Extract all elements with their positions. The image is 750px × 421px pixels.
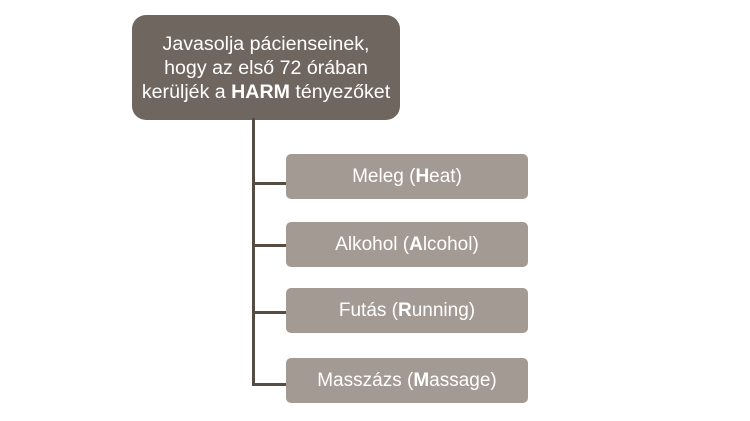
title box xyxy=(132,15,400,120)
title box: Javasolja pácienseinek, xyxy=(163,32,369,54)
connector: alcohol xyxy=(252,244,286,247)
item: alcohol xyxy=(286,222,528,267)
item: heat: Meleg ( eat) xyxy=(352,166,462,186)
connector: running xyxy=(252,311,286,314)
item: running: Futás ( unning) xyxy=(339,300,475,320)
item: massage: Masszázs ( assage) xyxy=(317,370,497,390)
title box: kerüljék a HARM tényezőket xyxy=(142,80,390,102)
item: massage xyxy=(286,358,528,403)
connector: heat xyxy=(252,182,286,185)
item: heat: H xyxy=(415,166,429,186)
item: alcohol: A xyxy=(409,234,423,254)
item: running xyxy=(286,288,528,333)
item: alcohol: Alkohol ( lcohol) xyxy=(335,234,479,254)
title box: hogy az első 72 órában xyxy=(164,56,368,78)
item: heat xyxy=(286,154,528,199)
connector: massage xyxy=(252,383,286,386)
connector trunk xyxy=(252,118,255,386)
item: massage: M xyxy=(413,370,429,390)
item: running: R xyxy=(398,300,412,320)
